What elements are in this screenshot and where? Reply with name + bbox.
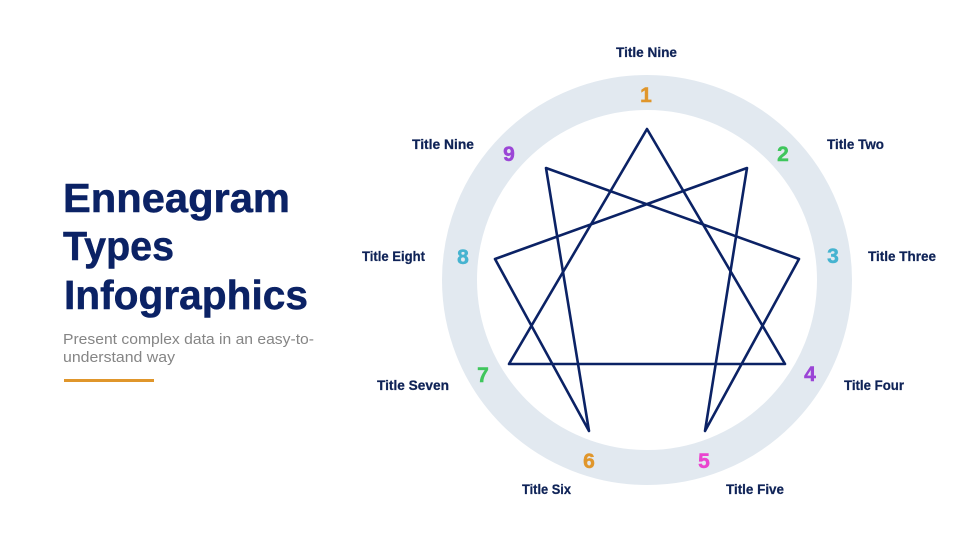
numbers: 8 — [457, 246, 469, 269]
title: Enneagram — [63, 175, 290, 221]
numbers: 4 — [804, 363, 816, 386]
enneagram star — [495, 129, 799, 431]
numbers: 1 — [640, 84, 652, 107]
numbers: 3 — [827, 245, 839, 268]
labels: Title Seven — [377, 377, 449, 393]
title — [63, 175, 308, 318]
labels: Title Three — [868, 248, 936, 264]
numbers: 2 — [777, 143, 789, 166]
ring — [460, 92, 834, 468]
numbers: 9 — [503, 143, 515, 166]
numbers: 6 — [583, 450, 595, 473]
numbers: 7 — [477, 364, 489, 387]
numbers — [457, 84, 839, 473]
labels: Title Five — [726, 481, 784, 497]
title: Types — [63, 223, 174, 269]
labels: Title Two — [827, 136, 884, 152]
labels: Title Six — [522, 481, 571, 497]
numbers: 5 — [698, 450, 710, 473]
labels: Title Eight — [362, 248, 425, 264]
title: Infographics — [64, 272, 308, 318]
labels: Title Nine — [616, 44, 677, 60]
accent underline — [64, 379, 154, 382]
labels: Title Nine — [412, 136, 474, 152]
subtitle: Present complex data in an easy-to- — [63, 331, 314, 348]
labels — [362, 44, 936, 497]
subtitle: understand way — [63, 349, 176, 366]
subtitle — [63, 331, 314, 366]
labels: Title Four — [844, 377, 905, 393]
